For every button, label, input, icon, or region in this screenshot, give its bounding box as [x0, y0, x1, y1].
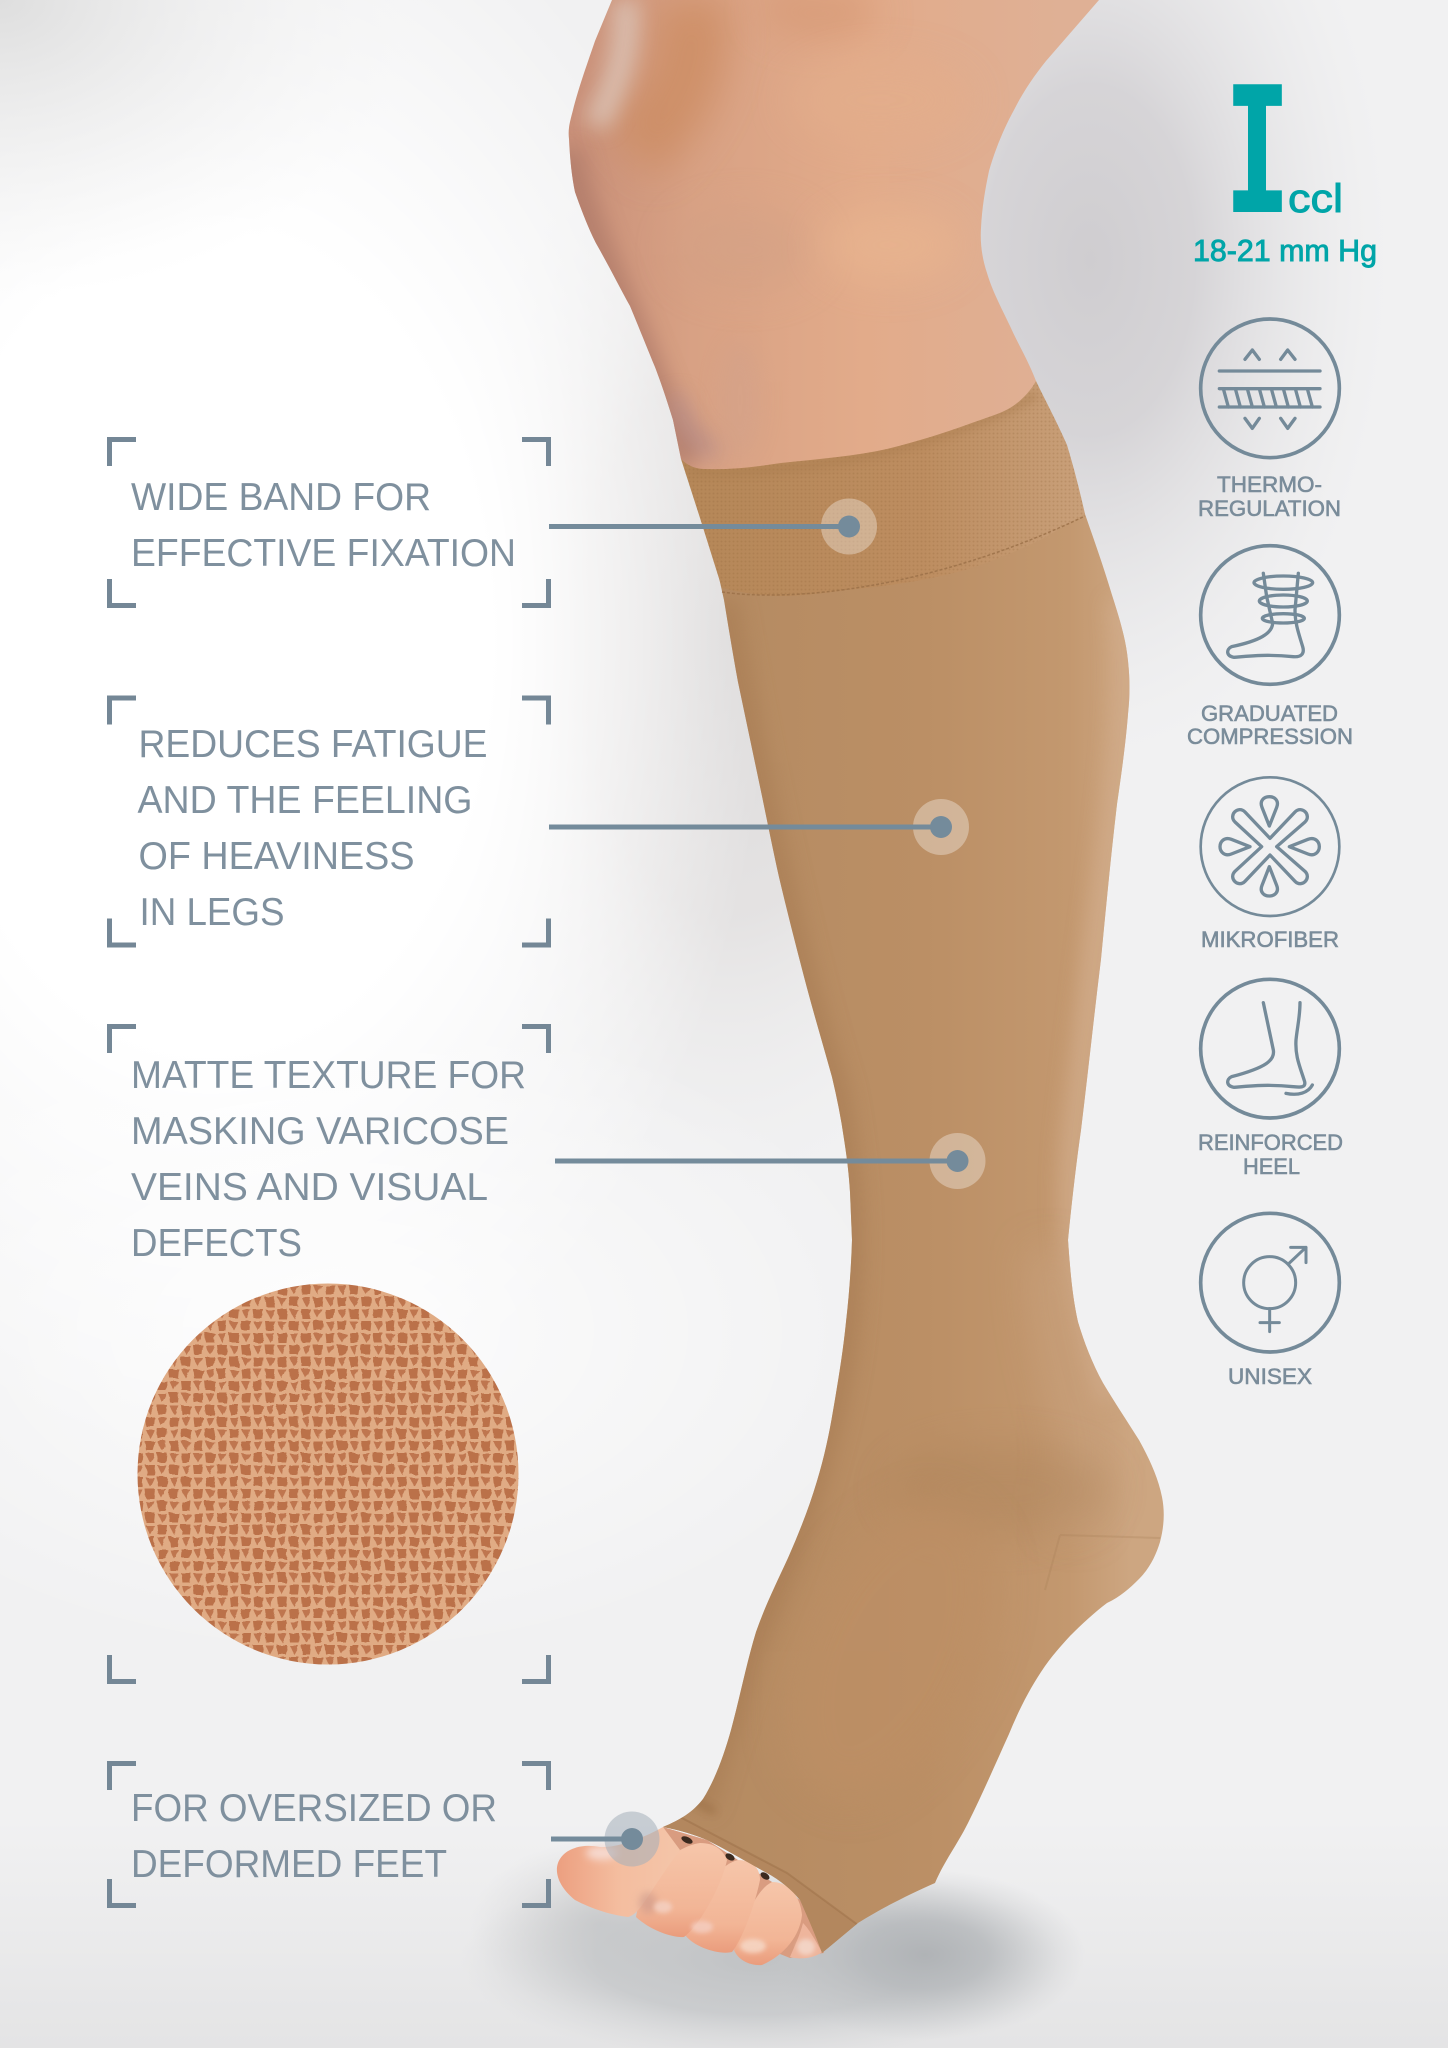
text: matte texture: MATTE TEXTURE FOR	[131, 1054, 526, 1097]
text: matte texture	[131, 1054, 526, 1265]
label: REINFORCED	[1198, 1130, 1343, 1155]
icon: microfiber star and drops	[1201, 777, 1339, 916]
label	[1198, 1130, 1343, 1179]
icon: foot with compression rings	[1201, 546, 1339, 684]
text: oversized feet: DEFORMED FEET	[131, 1843, 447, 1886]
pressure range: 18-21 mm Hg	[1193, 233, 1377, 268]
text: wide band: WIDE BAND FOR	[131, 476, 431, 519]
toes	[557, 1827, 824, 1965]
fabric swatch circle	[138, 1284, 518, 1664]
compression class badge	[1193, 52, 1377, 271]
bracket frame	[110, 440, 548, 606]
text: matte texture: MASKING VARICOSE	[131, 1110, 509, 1153]
text: fatigue: OF HEAVINESS	[138, 835, 414, 878]
big roman numeral: I	[1225, 52, 1290, 271]
icon: unisex symbol	[1201, 1213, 1339, 1352]
feature: unisex	[1201, 1213, 1339, 1389]
text: wide band: EFFECTIVE FIXATION	[131, 532, 516, 575]
text: fatigue: REDUCES FATIGUE	[138, 723, 488, 766]
label	[1187, 701, 1353, 749]
text: wide band	[131, 476, 516, 575]
feature: microfiber	[1201, 777, 1339, 952]
panel: matte texture callout	[110, 1026, 986, 1682]
panel: wide band callout	[110, 440, 877, 606]
label	[1198, 472, 1341, 521]
pointer: band	[549, 498, 877, 554]
label: HEEL	[1243, 1154, 1300, 1179]
bare thigh and knee	[565, 0, 1099, 510]
bracket frame	[110, 698, 548, 945]
pointer: calf	[549, 799, 969, 855]
text: fatigue: AND THE FEELING	[138, 779, 472, 822]
text: fatigue	[138, 723, 488, 934]
pointer: lower calf	[555, 1133, 986, 1189]
label: THERMO-	[1217, 472, 1322, 497]
label: COMPRESSION	[1187, 724, 1353, 749]
leg photograph	[557, 0, 1164, 1965]
label: MIKROFIBER	[1201, 927, 1339, 952]
icon: foot with heel mark	[1201, 979, 1339, 1118]
ccl unit: ccl	[1288, 177, 1343, 221]
bracket frame	[110, 1764, 548, 1906]
feature: reinforced heel	[1198, 979, 1343, 1179]
feature: graduated compression	[1187, 546, 1353, 749]
bracket frame	[110, 1026, 548, 1682]
text: oversized feet	[131, 1787, 497, 1886]
text: matte texture: DEFECTS	[131, 1222, 302, 1265]
icon: thermoregulation layers	[1201, 319, 1339, 458]
text: oversized feet: FOR OVERSIZED OR	[131, 1787, 497, 1830]
label: GRADUATED	[1201, 701, 1338, 726]
text: matte texture: VEINS AND VISUAL	[131, 1166, 488, 1209]
wide band	[681, 381, 1086, 596]
stocking foot and calf	[663, 500, 1164, 1953]
text: fatigue: IN LEGS	[140, 891, 284, 934]
feature: thermoregulation	[1198, 319, 1341, 521]
label: REGULATION	[1198, 496, 1341, 521]
pointer: toes	[551, 1812, 660, 1866]
panel: oversized feet callout	[110, 1764, 660, 1906]
label: UNISEX	[1228, 1364, 1312, 1389]
panel: fatigue callout	[110, 698, 969, 945]
